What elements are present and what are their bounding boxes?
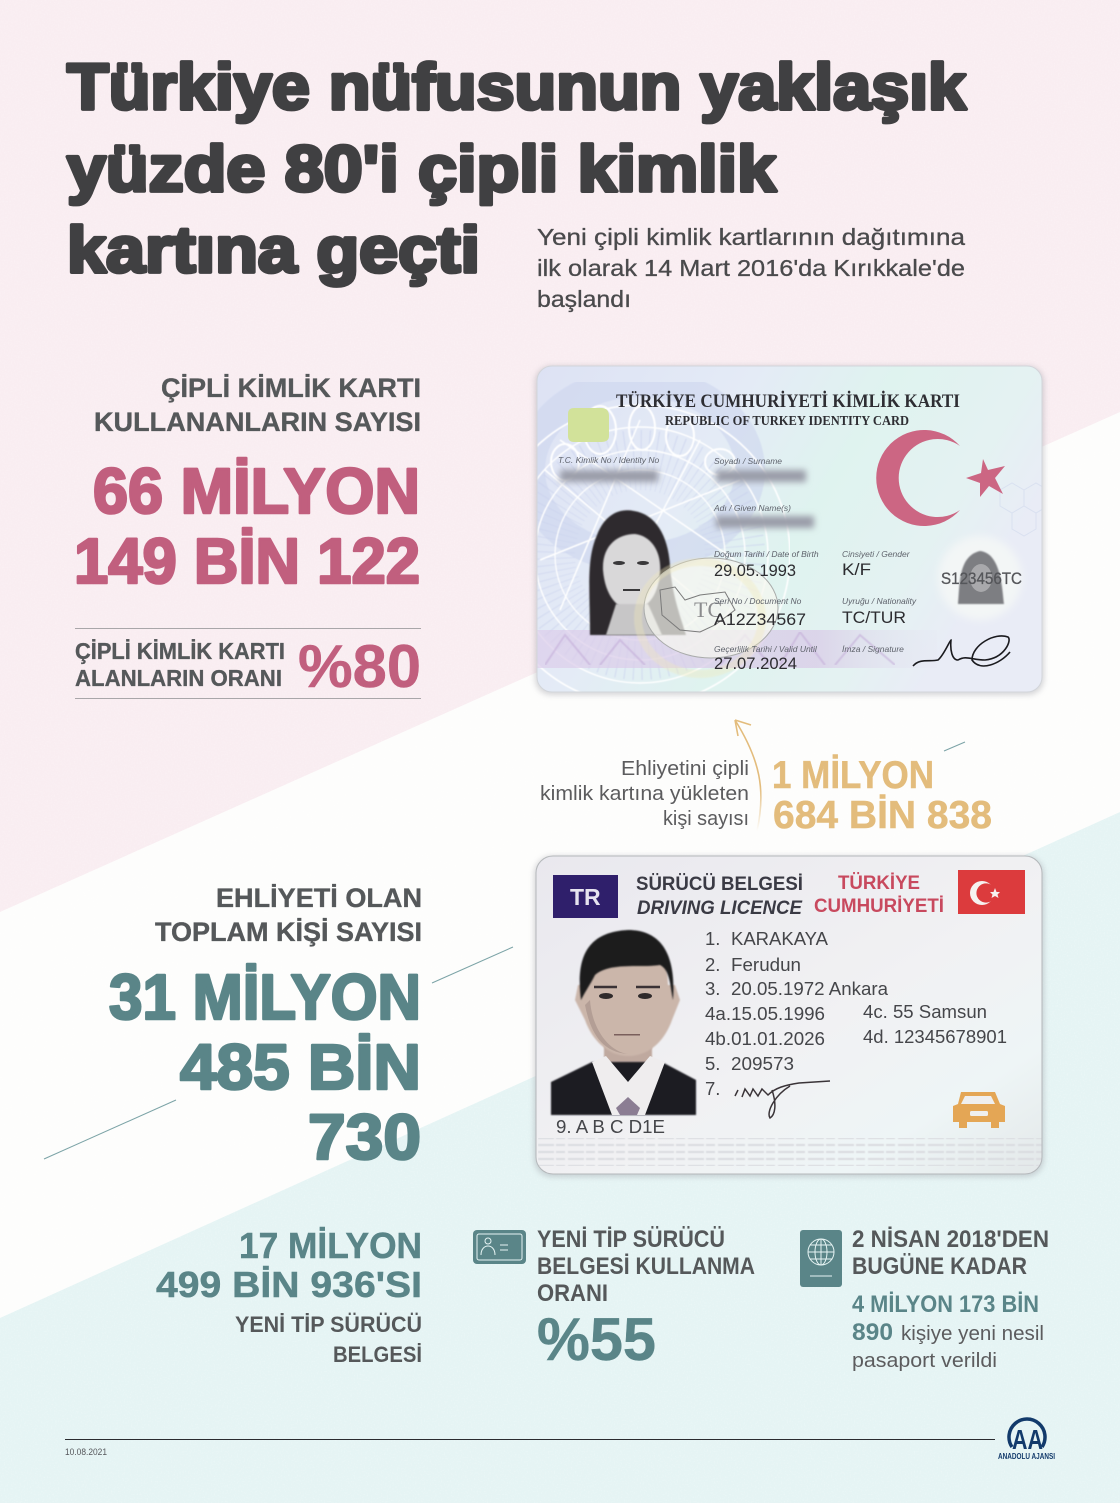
number: new type licence count: 17 MİLYON <box>239 1225 422 1266</box>
number: 1 million 684 thousand 838: 684 BİN 838 <box>773 794 992 837</box>
ratio: chip ID card share: ÇİPLİ KİMLİK KARTI <box>75 638 285 664</box>
stat: new type licence rate: %55 <box>537 1306 656 1373</box>
logo: Anadolu Ajansi: AA <box>1012 1424 1043 1455</box>
field labels: Cinsiyeti / Gender <box>842 549 911 559</box>
title <box>67 50 967 286</box>
heading: total licence holders: TOPLAM KİŞİ SAYISI <box>155 917 422 947</box>
licence header: TÜRKİYE <box>838 873 920 894</box>
licence header: TR <box>570 884 601 910</box>
field labels: İmza / Signature <box>842 644 904 654</box>
stat: new type licence rate: BELGESİ KULLANMA <box>537 1253 755 1280</box>
guilloche rosette <box>538 382 790 692</box>
licence fields: 2. <box>705 954 720 975</box>
number: new type licence count: 499 BİN 936'SI <box>156 1264 422 1305</box>
field values <box>714 560 906 673</box>
licence header: DRIVING LICENCE <box>637 898 803 919</box>
licence header <box>553 873 944 919</box>
photo of woman <box>589 510 686 635</box>
ratio: chip ID card share <box>75 628 421 700</box>
ID card image <box>538 366 1042 692</box>
licence signature <box>735 1081 830 1118</box>
heading: total licence holders: EHLİYETİ OLAN <box>216 883 422 913</box>
field labels: T.C. Kimlik No / Identity No <box>558 455 660 465</box>
field values: 27.07.2024 <box>714 654 797 673</box>
ghost photo: S123456TC <box>941 569 1022 588</box>
field labels: Adı / Given Name(s) <box>713 503 791 513</box>
licence border <box>536 856 1042 1174</box>
field labels: Seri No / Document No <box>714 596 802 606</box>
subtitle: başlandı <box>537 286 631 312</box>
flag <box>958 870 1025 914</box>
heading: total licence holders <box>155 883 422 947</box>
card titles <box>616 391 960 429</box>
stat: new type licence rate <box>537 1226 755 1373</box>
panel: licence stats <box>109 883 422 1367</box>
heading: chip ID card users: ÇİPLİ KİMLİK KARTI <box>161 373 421 403</box>
subtitle: Yeni çipli kimlik kartlarının dağıtımına <box>537 224 965 250</box>
licence fields: 4d. 12345678901 <box>863 1026 1007 1047</box>
stat: new passports: 890 <box>852 1319 893 1346</box>
accent line <box>944 742 965 751</box>
field values: 29.05.1993 <box>714 561 796 580</box>
ratio: chip ID card share: %80 <box>298 633 421 700</box>
licence fields: 3. <box>705 978 720 999</box>
date: 10.08.2021 <box>65 1447 107 1457</box>
hologram: TC <box>694 597 722 622</box>
field labels <box>558 455 917 654</box>
stat: new passports: kişiye yeni nesil <box>901 1323 1044 1345</box>
licence fields: 4a.15.05.1996 <box>705 1003 825 1024</box>
title: Türkiye nüfusunun yaklaşık <box>67 50 967 123</box>
title: kartına geçti <box>67 213 480 286</box>
number: 1 million 684 thousand 838 <box>772 754 992 837</box>
stat: new passports: pasaport verildi <box>852 1350 997 1372</box>
stat: new passports <box>852 1226 1049 1372</box>
subtitle: ilk olarak 14 Mart 2016'da Kırıkkale'de <box>537 255 965 281</box>
car icon <box>953 1092 1005 1128</box>
fine print <box>538 1138 1042 1166</box>
ghost photo <box>938 536 1022 620</box>
licence fields: 4c. 55 Samsun <box>863 1001 987 1022</box>
number: new type licence count: YENİ TİP SÜRÜCÜ <box>235 1312 422 1337</box>
crescent and star <box>876 430 1005 526</box>
licence fields: 5. <box>705 1053 720 1074</box>
field labels: Soyadı / Surname <box>714 456 782 466</box>
driving licence image <box>536 856 1042 1174</box>
licence fields <box>556 928 1007 1137</box>
big number: 31 million 485 thousand 730 <box>109 961 421 1173</box>
icon: ID card <box>473 1230 526 1264</box>
card shadow <box>535 366 1044 695</box>
hologram <box>638 558 778 674</box>
text: licence upload caption: kimlik kartına yükleten <box>540 783 749 805</box>
number: new type licence count: BELGESİ <box>333 1342 422 1367</box>
big number: 31 million 485 thousand 730: 485 BİN <box>180 1031 421 1103</box>
field values: A12Z34567 <box>714 610 806 629</box>
licence fields: 9. A B C D1E <box>556 1116 665 1137</box>
logo: Anadolu Ajansi: ANADOLU AJANSI <box>998 1452 1055 1461</box>
heading: chip ID card users: KULLANANLARIN SAYISI <box>94 407 421 437</box>
stat: new type licence rate: ORANI <box>537 1280 608 1307</box>
heading: chip ID card users <box>94 373 421 437</box>
big number: 66 million 149 thousand 122: 149 BİN 122 <box>74 525 420 597</box>
text: licence upload caption <box>540 758 749 830</box>
big number: 31 million 485 thousand 730: 31 MİLYON <box>109 961 421 1033</box>
field values: TC/TUR <box>842 608 906 627</box>
lavender band <box>538 630 894 668</box>
number: new type licence count <box>156 1225 422 1367</box>
icon: passport <box>800 1230 842 1287</box>
subtitle <box>537 224 965 312</box>
big number: 31 million 485 thousand 730: 730 <box>308 1101 421 1173</box>
licence fields: Ferudun <box>731 954 801 975</box>
stat: new type licence rate: YENİ TİP SÜRÜCÜ <box>537 1226 725 1253</box>
right pale pattern <box>1000 482 1042 536</box>
logo: Anadolu Ajansi <box>998 1419 1055 1461</box>
footer line <box>65 1438 995 1440</box>
stat: new passports: 4 MİLYON 173 BİN <box>852 1291 1039 1318</box>
ID card border <box>537 366 1042 692</box>
text: licence upload caption: Ehliyetini çipli <box>621 758 749 780</box>
text: licence upload caption: kişi sayısı <box>663 808 749 830</box>
licence fields: 209573 <box>731 1053 794 1074</box>
signature <box>913 636 1010 666</box>
number: 1 million 684 thousand 838: 1 MİLYON <box>772 754 934 797</box>
licence header: SÜRÜCÜ BELGESİ <box>636 874 803 895</box>
title: yüzde 80'i çipli kimlik <box>67 132 777 205</box>
licence fields: 7. <box>705 1078 720 1099</box>
big number: 66 million 149 thousand 122: 66 MİLYON <box>93 455 420 527</box>
ratio: chip ID card share: ALANLARIN ORANI <box>75 665 282 691</box>
accent lines <box>44 947 513 1159</box>
card titles: TÜRKİYE CUMHURİYETİ KİMLİK KARTI <box>616 391 960 412</box>
field values: K/F <box>842 560 871 579</box>
card shadow <box>534 856 1044 1177</box>
licence fields: 20.05.1972 Ankara <box>731 978 889 999</box>
field labels: Geçerlilik Tarihi / Valid Until <box>714 644 818 654</box>
arrow <box>735 720 761 831</box>
blurred personal data <box>560 470 814 528</box>
licence fields: KARAKAYA <box>731 928 829 949</box>
field labels: Uyruğu / Nationality <box>842 596 917 606</box>
licence header: CUMHURİYETİ <box>814 896 944 917</box>
card titles: REPUBLIC OF TURKEY IDENTITY CARD <box>665 414 909 429</box>
stat: new passports: BUGÜNE KADAR <box>852 1253 1027 1280</box>
chip <box>568 408 609 442</box>
stat: new passports: 2 NİSAN 2018'DEN <box>852 1226 1049 1253</box>
field labels: Doğum Tarihi / Date of Birth <box>714 549 819 559</box>
licence fields: 4b.01.01.2026 <box>705 1028 825 1049</box>
panel: chip ID card stats <box>74 373 421 700</box>
big number: 66 million 149 thousand 122 <box>74 455 420 597</box>
licence fields: 1. <box>705 928 720 949</box>
photo of man <box>551 930 696 1115</box>
